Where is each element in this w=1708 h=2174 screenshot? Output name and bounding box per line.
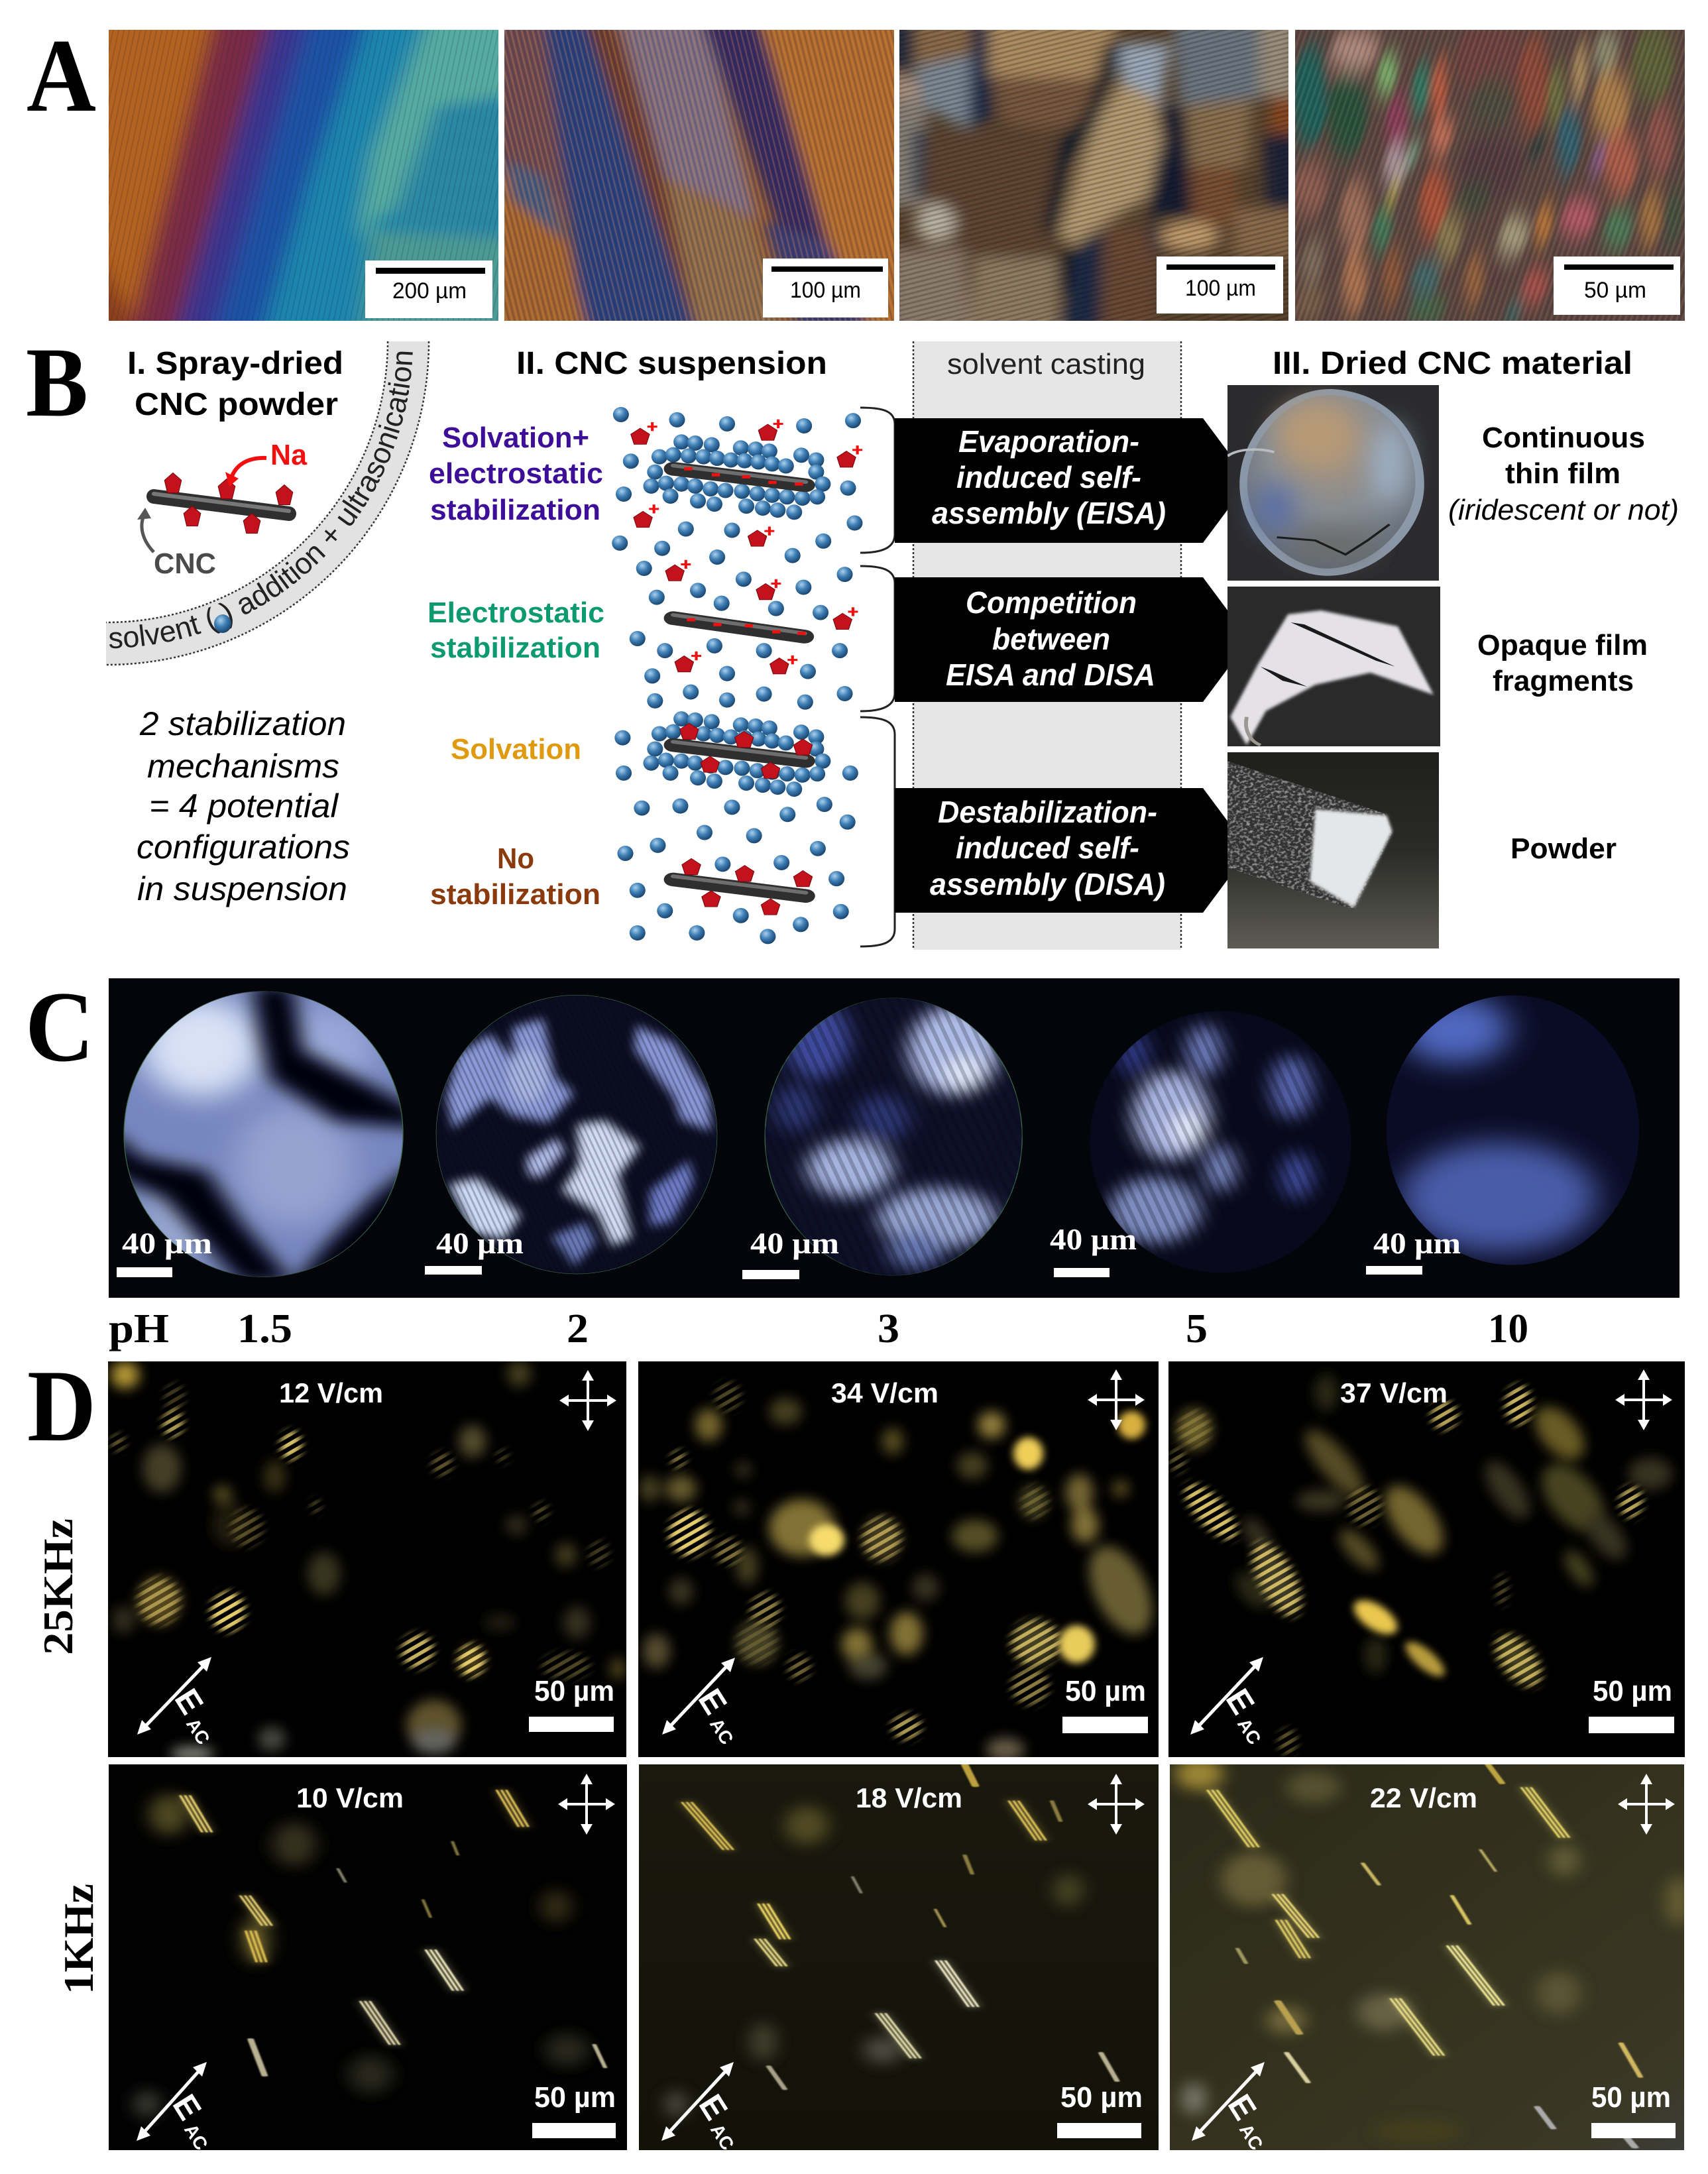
field arrow 10 V/cm bbox=[137, 2062, 212, 2153]
field direction arrows and labels bbox=[137, 1657, 1267, 2153]
scale 40 um pH 3 bbox=[742, 1226, 839, 1279]
scale label 100 um second bbox=[1157, 257, 1283, 314]
field arrow 12 V/cm bbox=[137, 1657, 214, 1748]
arrow: DISA: induced self- bbox=[956, 830, 1139, 865]
panel letter A: A bbox=[27, 18, 96, 134]
field arrow 18 V/cm bbox=[661, 2062, 738, 2153]
label: electrostatic stabilization bbox=[427, 597, 604, 664]
heading I: spray-dried CNC powder bbox=[127, 346, 343, 422]
panel D: 34 V/cm micrograph bbox=[638, 1361, 1163, 1762]
icon crossed arrows 22 V/cm bbox=[1618, 1774, 1675, 1835]
scale bars of panel D bbox=[529, 1675, 1676, 2138]
label: solvation plus electrostatic stabilization: stabilization bbox=[430, 494, 600, 526]
label solvent casting: solvent casting bbox=[947, 348, 1145, 380]
pH axis labels: 2 bbox=[567, 1306, 589, 1351]
scale 50 um 12 V/cm: 50 µm bbox=[534, 1675, 614, 1707]
braces grouping configurations bbox=[860, 408, 895, 946]
field arrow 37 V/cm bbox=[1190, 1657, 1265, 1748]
scale 50 um 37 V/cm bbox=[1589, 1675, 1674, 1733]
arrow to sodium bbox=[232, 458, 266, 476]
label opaque film fragments: fragments bbox=[1493, 665, 1634, 697]
scale 50 um 18 V/cm bbox=[1057, 2081, 1143, 2138]
label opaque film fragments: Opaque film bbox=[1477, 629, 1648, 661]
scale 40 um pH 5 bbox=[1050, 1222, 1137, 1277]
scale 40 um pH 1.5 bbox=[117, 1226, 212, 1277]
field arrow 18 V/cm: AC bbox=[707, 2120, 738, 2153]
heading I: spray-dried CNC powder: CNC powder bbox=[135, 387, 338, 422]
arrow: competition between EISA and DISA bbox=[895, 577, 1249, 702]
panel D: 12 V/cm micrograph bbox=[108, 1360, 626, 1760]
field arrow 12 V/cm: AC bbox=[182, 1715, 214, 1748]
panel C: pH micrographs bbox=[109, 978, 1680, 1298]
label: no stabilization bbox=[430, 842, 600, 911]
icon crossed arrows 34 V/cm bbox=[1088, 1369, 1145, 1430]
photo: continuous thin film bbox=[1227, 385, 1439, 581]
scale 40 um pH 1.5: 40 µm bbox=[122, 1226, 212, 1260]
arrow: EISA: assembly (EISA) bbox=[932, 496, 1166, 530]
scale 50 um 22 V/cm bbox=[1591, 2081, 1676, 2138]
voltage labels: 22 V/cm bbox=[1370, 1782, 1477, 1813]
scale 50 um 34 V/cm bbox=[1062, 1675, 1148, 1733]
scale 40 um pH 5: 40 µm bbox=[1050, 1222, 1137, 1256]
icon crossed arrows 18 V/cm bbox=[1088, 1774, 1145, 1835]
label continuous thin film: Continuous bbox=[1482, 422, 1645, 454]
label CNC: CNC bbox=[154, 547, 216, 580]
panel A: micrograph 1 orange to teal bbox=[109, 30, 498, 321]
voltage labels: 34 V/cm bbox=[831, 1377, 939, 1408]
label opaque film fragments bbox=[1477, 629, 1648, 697]
scale 40 um pH 3: 40 µm bbox=[750, 1226, 839, 1260]
text: stabilization mechanisms note: = 4 potential bbox=[149, 787, 339, 825]
panel D: 22 V/cm micrograph bbox=[1170, 1758, 1692, 2150]
circle pH 5 bbox=[1079, 1008, 1362, 1275]
icon crossed arrows 37 V/cm bbox=[1615, 1369, 1672, 1430]
pH axis labels: 3 bbox=[878, 1306, 899, 1351]
scale label 100 um: 100 µm bbox=[790, 278, 861, 303]
field arrow 34 V/cm bbox=[662, 1658, 738, 1748]
arrow: competition between EISA and DISA: EISA and DISA bbox=[946, 658, 1155, 692]
label: no stabilization: stabilization bbox=[430, 878, 600, 911]
label continuous thin film bbox=[1448, 422, 1679, 526]
label Na: Na bbox=[270, 439, 308, 471]
scale label 200 um bbox=[365, 260, 492, 318]
panel letter B: B bbox=[26, 327, 88, 437]
scale 50 um 37 V/cm: 50 µm bbox=[1593, 1675, 1672, 1707]
voltage labels: 10 V/cm bbox=[296, 1782, 404, 1813]
pH axis labels bbox=[109, 1306, 1528, 1351]
side label 25KHz: 25KHz bbox=[34, 1518, 82, 1655]
panel D: 18 V/cm micrograph bbox=[639, 1764, 1159, 2150]
panel letter C: C bbox=[25, 971, 94, 1082]
scale 50 um 10 V/cm: 50 µm bbox=[534, 2081, 616, 2114]
crossed polarizer icons bbox=[558, 1369, 1675, 1835]
circle pH 3 bbox=[764, 998, 1023, 1276]
arrow: EISA: Evaporation- bbox=[958, 424, 1139, 459]
curved band: solvent addition and ultrasonication: solvent ( ) addition + ultrasonication bbox=[109, 351, 413, 648]
scale label 50 um bbox=[1554, 257, 1680, 315]
circle pH 2 micrograph bbox=[436, 995, 717, 1274]
arrow: EISA: induced self- bbox=[956, 460, 1141, 494]
scale 50 um 12 V/cm bbox=[529, 1675, 614, 1732]
scale 40 um pH 2 bbox=[425, 1226, 524, 1275]
text: stabilization mechanisms note bbox=[137, 705, 350, 907]
fingerprint texture over panel C bbox=[756, 988, 1342, 1279]
field arrow 37 V/cm: E bbox=[1219, 1682, 1262, 1721]
label: electrostatic stabilization: stabilization bbox=[430, 632, 600, 664]
voltage labels: 12 V/cm bbox=[279, 1377, 383, 1408]
panel D: 37 V/cm micrograph bbox=[1168, 1361, 1685, 1757]
arrow: DISA: Destabilization- bbox=[938, 795, 1157, 829]
panel D: 10 V/cm micrograph bbox=[109, 1764, 627, 2150]
label: solvation plus electrostatic stabilization: Solvation+ bbox=[442, 422, 589, 454]
scale 40 um pH 10: 40 µm bbox=[1373, 1226, 1461, 1260]
scale label 100 um second: 100 µm bbox=[1185, 276, 1256, 301]
scale 40 um pH 2: 40 µm bbox=[436, 1226, 524, 1260]
heading I: spray-dried CNC powder: I. Spray-dried bbox=[127, 346, 343, 381]
configuration 2: charged rod bbox=[665, 560, 858, 674]
text: stabilization mechanisms note: 2 stabilization bbox=[139, 705, 346, 742]
side label 1KHz: 1KHz bbox=[55, 1884, 102, 1994]
field arrow 10 V/cm: AC bbox=[180, 2120, 212, 2153]
scale label 50 um: 50 µm bbox=[1584, 278, 1646, 303]
scale 50 um 34 V/cm: 50 µm bbox=[1065, 1675, 1146, 1707]
field arrow 10 V/cm: E bbox=[166, 2088, 209, 2126]
scale bars of panel C bbox=[117, 1222, 1461, 1279]
scale 40 um pH 10 bbox=[1366, 1226, 1461, 1275]
configuration 3: solvated rod with bound ions bbox=[643, 711, 830, 797]
field arrow 22 V/cm: E bbox=[1221, 2088, 1264, 2126]
field arrow 34 V/cm: AC bbox=[706, 1715, 738, 1748]
CNC rod with sodium ions bbox=[137, 439, 308, 580]
field arrow 37 V/cm: AC bbox=[1233, 1715, 1265, 1748]
arrow: DISA bbox=[895, 788, 1249, 913]
field arrow 34 V/cm: E bbox=[691, 1682, 734, 1721]
diagram: CNC suspension particles bbox=[612, 407, 863, 944]
arrow: EISA bbox=[895, 418, 1249, 543]
pH axis labels: pH bbox=[109, 1306, 169, 1351]
text: stabilization mechanisms note: mechanisms bbox=[147, 748, 339, 785]
heading II: CNC suspension: II. CNC suspension bbox=[516, 346, 827, 381]
free solvent balls bbox=[612, 407, 863, 944]
field arrow 22 V/cm bbox=[1192, 2062, 1267, 2153]
arrow: competition between EISA and DISA: between bbox=[992, 622, 1110, 656]
label: electrostatic stabilization: Electrostatic bbox=[427, 597, 604, 629]
arrow: competition between EISA and DISA: Competition bbox=[966, 585, 1137, 620]
label powder: Powder bbox=[1510, 832, 1617, 865]
label: solvation: Solvation bbox=[451, 733, 581, 766]
voltage labels: 37 V/cm bbox=[1340, 1377, 1448, 1408]
pH axis labels: 5 bbox=[1186, 1306, 1208, 1351]
circle pH 10 bbox=[1384, 996, 1646, 1268]
pH axis labels: 10 bbox=[1488, 1306, 1528, 1351]
heading III: dried CNC material: III. Dried CNC material bbox=[1273, 346, 1632, 381]
photo: powder bbox=[1227, 752, 1439, 948]
field arrow 22 V/cm: AC bbox=[1235, 2120, 1267, 2153]
scale label 100 um bbox=[763, 258, 888, 317]
icon crossed arrows 12 V/cm bbox=[559, 1370, 616, 1431]
arrow: DISA: assembly (DISA) bbox=[930, 867, 1165, 901]
arrow to CNC bbox=[142, 516, 154, 552]
configuration 4: bare rod with bound ions bbox=[673, 858, 813, 915]
diagram: solvent casting band bbox=[913, 341, 1181, 950]
scale label 200 um: 200 µm bbox=[392, 278, 467, 304]
icon crossed arrows 10 V/cm bbox=[558, 1774, 615, 1835]
text: stabilization mechanisms note: in suspension bbox=[137, 870, 347, 907]
circle pH 1.5 bbox=[123, 991, 404, 1277]
text: stabilization mechanisms note: configurations bbox=[137, 829, 350, 866]
voltage labels bbox=[279, 1377, 1477, 1813]
scale bars of panel A bbox=[365, 257, 1680, 318]
scale 50 um 10 V/cm bbox=[532, 2081, 616, 2138]
label continuous thin film: thin film bbox=[1505, 457, 1621, 490]
label: solvation plus electrostatic stabilization: electrostatic bbox=[429, 457, 603, 490]
voltage labels: 18 V/cm bbox=[856, 1782, 962, 1813]
field arrow 12 V/cm: E bbox=[168, 1682, 211, 1721]
panel A: micrograph 4 multicoloured streaks bbox=[1198, 0, 1708, 420]
panel letter D: D bbox=[27, 1349, 96, 1463]
material labels bbox=[1448, 422, 1679, 865]
photo: opaque film fragments bbox=[1227, 587, 1440, 746]
configuration 1: solvated charged rod bbox=[631, 420, 862, 546]
panel A: micrograph 3 tan and navy chevrons bbox=[889, 21, 1298, 330]
panel A: micrograph 2 brown and blue streaks bbox=[479, 13, 916, 336]
label continuous thin film: (iridescent or not) bbox=[1448, 494, 1679, 526]
scale 50 um 18 V/cm: 50 µm bbox=[1060, 2081, 1143, 2114]
label: no stabilization: No bbox=[497, 842, 534, 875]
pH axis labels: 1.5 bbox=[237, 1306, 292, 1351]
scale 50 um 22 V/cm: 50 µm bbox=[1591, 2081, 1671, 2114]
label: solvation plus electrostatic stabilization bbox=[429, 422, 603, 526]
field arrow 18 V/cm: E bbox=[692, 2088, 735, 2126]
